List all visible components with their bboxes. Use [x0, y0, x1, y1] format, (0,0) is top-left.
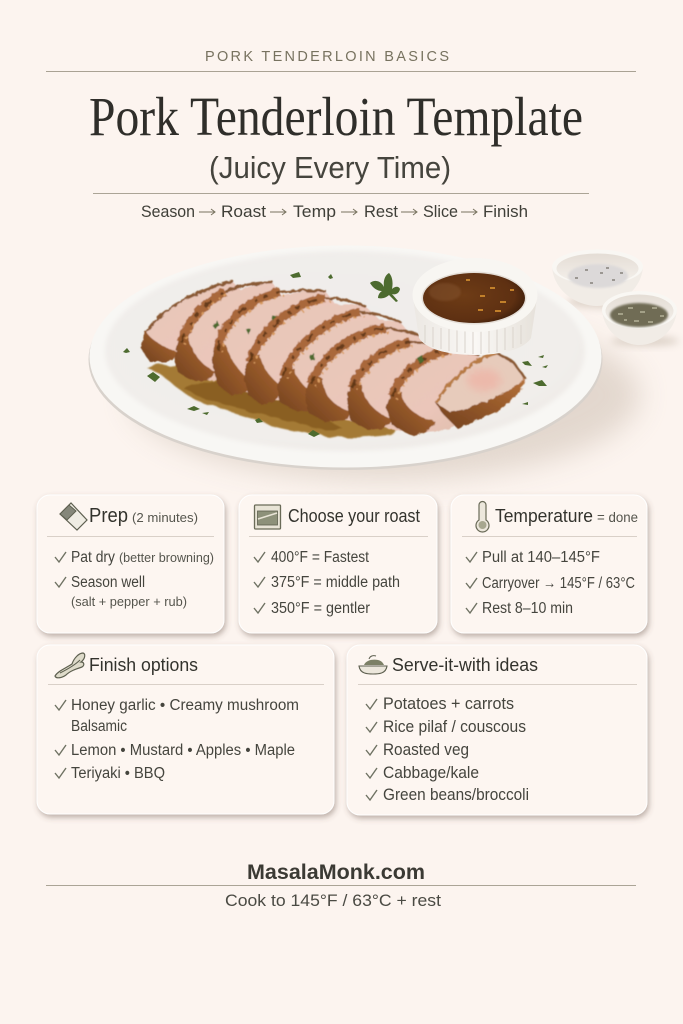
prep list: Season well	[71, 574, 145, 591]
icon: thermometer	[476, 502, 489, 532]
slice 8	[386, 350, 490, 436]
roast list: 400°F = Fastest	[271, 549, 370, 566]
roast list	[254, 549, 400, 617]
process steps: Temp	[293, 202, 336, 221]
icon: salt shaker	[60, 503, 87, 530]
process steps: Season	[141, 202, 195, 221]
header: eyebrow label: PORK TENDERLOIN BASICS	[205, 49, 449, 65]
title: Pork Tenderloin Template	[89, 86, 583, 147]
roast list: 375°F = middle path	[271, 574, 400, 591]
small bowl: salt	[552, 250, 643, 308]
sauce pool	[147, 360, 400, 438]
prep list: Pat dry	[71, 549, 115, 566]
finish list: Balsamic	[71, 718, 127, 735]
serve list: Potatoes + carrots	[383, 695, 514, 713]
card: temperature	[451, 495, 647, 633]
card: prep	[37, 495, 224, 633]
finish list: Teriyaki • BBQ	[71, 765, 165, 782]
finish list: Honey garlic • Creamy mushroom	[71, 697, 299, 714]
serve list: Green beans/broccoli	[383, 786, 529, 804]
finish list: Lemon • Mustard • Apples • Maple	[71, 742, 295, 759]
card: choose your roast	[239, 495, 437, 633]
small bowl: pepper	[602, 291, 679, 346]
subtitle: (Juicy Every Time)	[209, 150, 451, 185]
process steps: Rest	[364, 202, 398, 221]
prep list: (better browning)	[119, 551, 214, 565]
icon: tongs	[55, 653, 85, 678]
slice 1	[141, 281, 250, 362]
finish heading: Finish options	[89, 655, 198, 675]
prep heading	[89, 505, 198, 527]
serve list: Roasted veg	[383, 741, 469, 759]
prep list: (salt + pepper + rub)	[71, 595, 187, 609]
slice 2	[174, 282, 285, 381]
slice 7	[347, 342, 460, 432]
finish list	[55, 697, 299, 782]
ramekin with sauce	[412, 258, 538, 355]
temperature heading: = done	[597, 509, 638, 525]
plate	[88, 246, 602, 470]
icon: oven	[254, 505, 280, 529]
serve list	[366, 695, 529, 804]
serve list: Rice pilaf / couscous	[383, 718, 526, 736]
temperature list: Pull at 140–145°F	[482, 549, 600, 566]
temperature list	[466, 549, 635, 617]
slice 4	[244, 298, 385, 405]
roast heading: Choose your roast	[288, 506, 420, 526]
card: finish options	[37, 645, 334, 814]
slice 5	[277, 312, 415, 412]
prep heading: Prep	[89, 505, 128, 527]
prep heading: (2 minutes)	[132, 510, 198, 525]
herbs on meat	[212, 315, 424, 363]
prep list	[55, 549, 214, 609]
slice 3	[212, 290, 340, 396]
card: serve-it-with ideas	[347, 645, 647, 815]
process steps: Roast	[221, 202, 266, 221]
icon: salad bowl	[359, 656, 387, 674]
temperature list: Carryover → 145°F / 63°C	[482, 575, 635, 592]
slice 9	[435, 353, 525, 429]
temperature list: Rest 8–10 min	[482, 600, 573, 617]
slice 6	[305, 328, 440, 424]
footer: tagline: Cook to 145°F / 63°C + rest	[225, 891, 441, 910]
footer: site name: MasalaMonk.com	[247, 861, 425, 884]
serve list: Cabbage/kale	[383, 764, 479, 782]
process steps: Slice	[423, 202, 458, 221]
hero illustration: plated pork tenderloin	[88, 246, 679, 480]
serve heading: Serve-it-with ideas	[392, 655, 538, 675]
temperature heading: Temperature	[495, 506, 593, 526]
pork slices	[141, 281, 525, 436]
process steps	[141, 202, 528, 221]
roast list: 350°F = gentler	[271, 600, 370, 617]
herb garnishes	[123, 272, 548, 437]
plate shadow	[130, 310, 640, 480]
process steps: Finish	[483, 202, 528, 221]
